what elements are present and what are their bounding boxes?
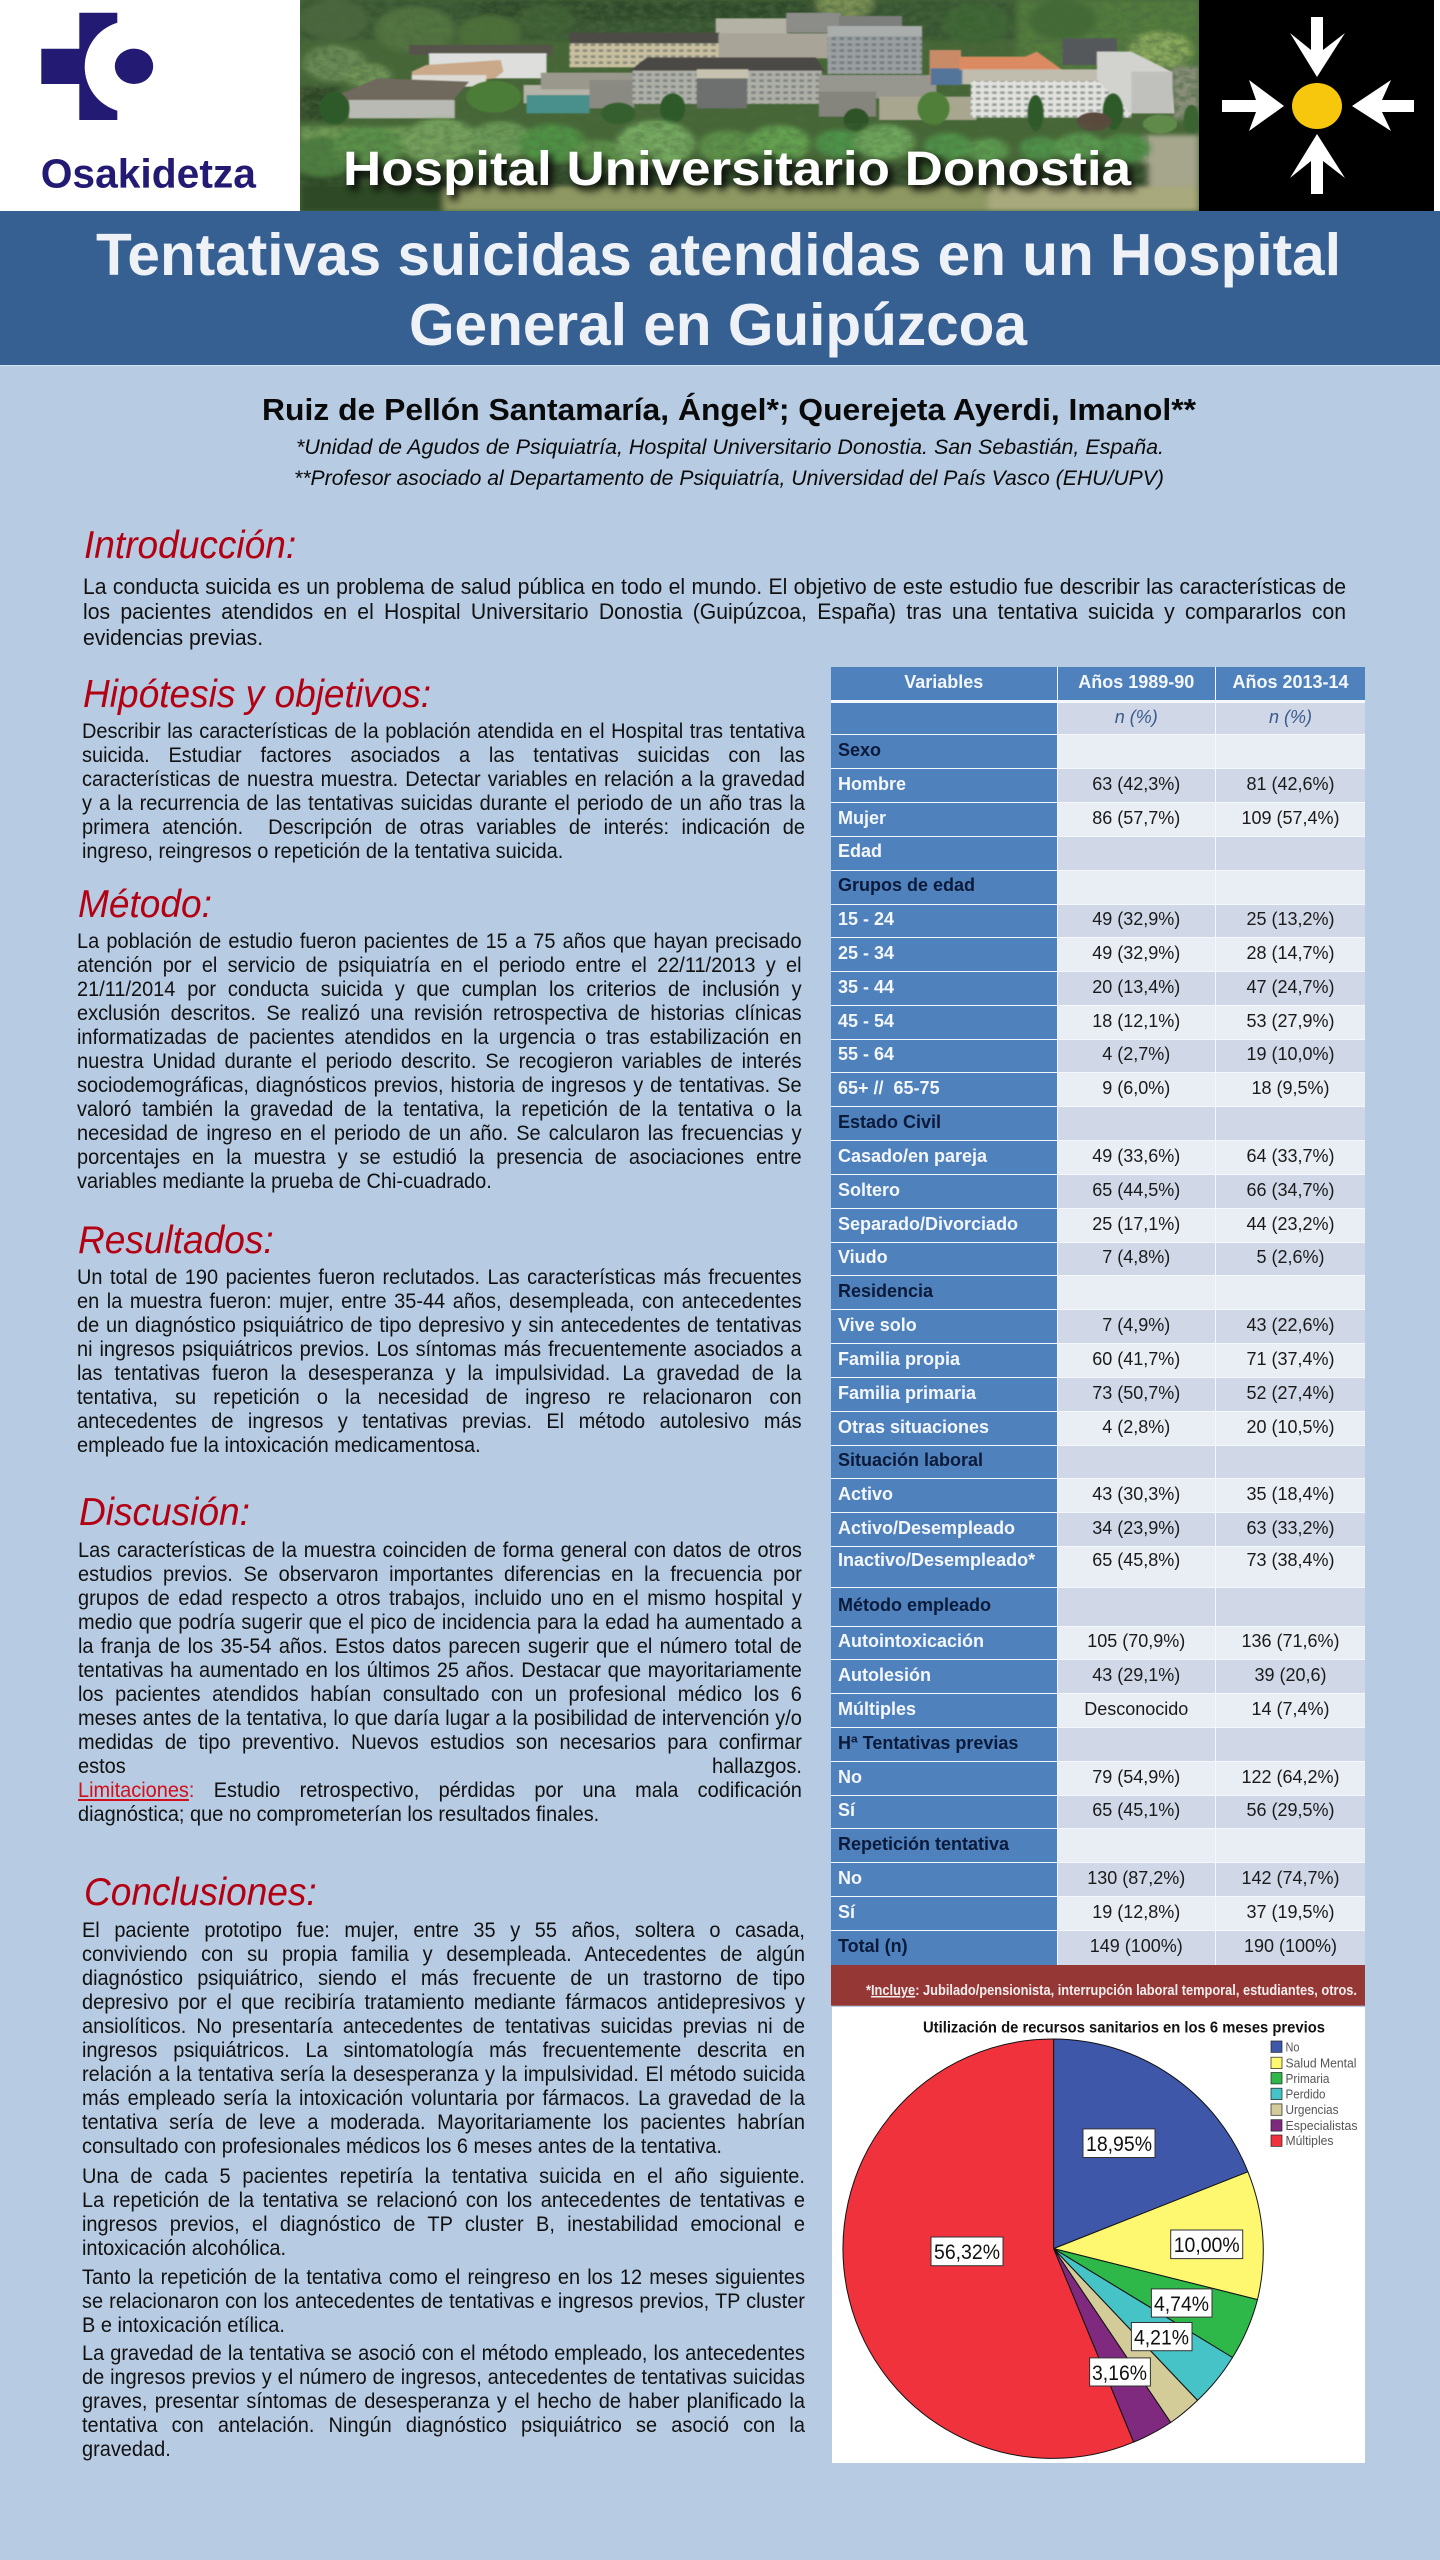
legend: Perdido	[1286, 2088, 1326, 2102]
row: 35 - 44: 35 - 44	[838, 976, 894, 996]
data label: 10,00%: 10,00%	[1174, 2234, 1240, 2257]
text: conclusiones párrafo 1: ansiolíticos. No presentaría antecedentes de tentativas suicidas previas ni de	[82, 2015, 805, 2038]
text: conclusiones párrafo 4: graves, presentar síntomas de desesperanza y el hecho de haber planificado la	[82, 2390, 805, 2412]
text: resultados: de un diagnóstico psiquiátrico de tipo depresivo y sin antecedentes de tentativas	[77, 1314, 802, 1336]
text: método: exclusión descritos. Se realizó una revisión retrospectiva de historias clínicas	[77, 1002, 802, 1025]
row: Activo: 35 (18,4%)	[1246, 1484, 1335, 1504]
row: Múltiples: Desconocido	[1084, 1698, 1188, 1718]
row: Sí (tentativas): Sí	[838, 1800, 855, 1820]
row: Otras situaciones: 4 (2,8%)	[1102, 1416, 1170, 1436]
row: Viudo: 7 (4,8%)	[1102, 1247, 1170, 1267]
row: No (tentativas): 79 (54,9%)	[1092, 1766, 1180, 1786]
row: 25 - 34	[831, 938, 1365, 972]
legend: Salud Mental	[1286, 2056, 1356, 2070]
text: conclusiones párrafo 1: depresivo por el que recibiría tratamiento mediante fármacos antidepresivos y	[82, 1991, 805, 2014]
row: Repetición tentativa	[831, 1829, 1365, 1863]
text: método: La población de estudio fueron pacientes de 15 a 75 años que hayan precisado	[77, 930, 802, 953]
row: Grupos de edad: Grupos de edad	[838, 875, 975, 895]
row: Activo/Desempleado	[831, 1513, 1365, 1547]
row: n (%)	[831, 703, 1365, 735]
text: conclusiones párrafo 2: ingresos previos, el diagnóstico de TP cluster B, inestabilidad emocional e	[82, 2212, 805, 2236]
text: resultados: las tentativas fueron la desesperanza y la impulsividad. La gravedad de la	[77, 1362, 802, 1384]
photo: aerial view of the hospital	[300, 0, 1199, 211]
row: Múltiples: 14 (7,4%)	[1251, 1698, 1330, 1718]
row: Estado Civil: Estado Civil	[838, 1112, 941, 1132]
footnote band and pie chart	[831, 1965, 1365, 2463]
row: Separado/Divorciado	[831, 1209, 1365, 1243]
right-hand buildings	[819, 75, 936, 98]
text: conclusiones párrafo 3	[82, 2266, 805, 2336]
data label: 56,32%: 56,32%	[934, 2241, 1000, 2264]
text: discusión: medio que podría sugerir que el pico de incidencia para la edad ha aumentado a	[78, 1611, 802, 1634]
row: No (repetición): No	[838, 1868, 862, 1888]
row: 45 - 54: 18 (12,1%)	[1092, 1010, 1180, 1030]
row: 15 - 24: 15 - 24	[838, 909, 894, 929]
data label: 4,74%: 4,74%	[1154, 2293, 1209, 2316]
text: resultados: antecedentes de ingresos y tentativas previas. El método autolesivo más	[77, 1410, 802, 1432]
row: Autointoxicación	[831, 1627, 1365, 1660]
text: discusión: Las características de la muestra coinciden de forma general con datos de otros	[78, 1539, 802, 1562]
chart title: Utilización de recursos sanitarios en los 6 meses previos	[923, 2020, 1325, 2036]
row: Soltero	[831, 1175, 1365, 1209]
row: Múltiples: Múltiples	[838, 1698, 916, 1718]
header banner	[0, 0, 1440, 211]
row: Familia primaria: Familia primaria	[838, 1382, 976, 1402]
text: conclusiones párrafo 1: conviviendo con su propia familia y desempleada. Antecedentes de algún	[82, 1943, 805, 1966]
row: Sí (repetición): Sí	[838, 1902, 855, 1922]
top-centre buildings	[716, 18, 787, 35]
row: 55 - 64: 19 (10,0%)	[1246, 1044, 1335, 1064]
heading: Resultados: Resultados:	[78, 1218, 274, 1262]
text: conclusiones párrafo 2: Una de cada 5 pacientes repetiría la tentativa suicida en el año siguiente.	[82, 2164, 805, 2188]
data label: 3,16%: 3,16%	[1092, 2362, 1147, 2385]
text: conclusiones párrafo 4	[82, 2342, 805, 2460]
row: Otras situaciones	[831, 1412, 1365, 1446]
row: Autolesión	[831, 1660, 1365, 1694]
authors and affiliations	[262, 392, 1197, 490]
row: Residencia	[831, 1276, 1365, 1310]
row: Mujer: 109 (57,4%)	[1241, 808, 1340, 828]
row: Método empleado: Método empleado	[838, 1595, 991, 1615]
heading: Conclusiones: Conclusiones:	[84, 1871, 317, 1914]
row: Edad: Edad	[838, 841, 882, 861]
row: 45 - 54: 53 (27,9%)	[1246, 1010, 1335, 1030]
row: Soltero: 66 (34,7%)	[1246, 1180, 1335, 1200]
text: resultados: tentativa, su repetición o la necesidad de ingreso re relacionaron con	[77, 1386, 802, 1408]
row: Sí (repetición): 37 (19,5%)	[1246, 1902, 1335, 1922]
row: Autointoxicación: 136 (71,6%)	[1241, 1631, 1340, 1651]
data table: variables by period	[831, 667, 1365, 1965]
row: n (%): n (%)	[1115, 706, 1158, 726]
panel: Resultados	[77, 1218, 802, 1456]
text: resultados: ni ingresos psiquiátricos previos. Los síntomas más frecuentemente asociados a	[77, 1338, 802, 1360]
text: conclusiones párrafo 1: ingresos psiquiátricos. La sintomatología más frecuentemente descrita en	[82, 2039, 805, 2062]
icon: arrows pointing to centre	[1222, 17, 1414, 194]
row: Sí (tentativas)	[831, 1796, 1365, 1829]
row: Hombre: Hombre	[838, 774, 906, 794]
row: Edad	[831, 837, 1365, 870]
title: General en Guipúzcoa	[409, 292, 1028, 358]
text: introducción: los pacientes atendidos en el Hospital Universitario Donostia (Guipúzcoa, España) tras una tentativa suicida y compararlos con	[83, 599, 1346, 624]
row: 25 - 34: 49 (32,9%)	[1092, 942, 1180, 962]
row: Mujer: Mujer	[838, 808, 886, 828]
row: 35 - 44: 20 (13,4%)	[1092, 976, 1180, 996]
row: Vive solo	[831, 1310, 1365, 1344]
heading: Método: Método:	[78, 883, 212, 926]
text: método: atención por el servicio de psiquiatría en el periodo entre el 22/11/2013 y el	[77, 954, 802, 977]
panel: Método	[77, 883, 802, 1193]
row: Hombre	[831, 769, 1365, 803]
text: método: variables mediante la prueba de Chi-cuadrado.	[77, 1170, 492, 1193]
row: Sí (repetición)	[831, 1897, 1365, 1931]
text: discusión	[78, 1539, 802, 1826]
row: 15 - 24: 25 (13,2%)	[1246, 909, 1335, 929]
text: discusión: grupos de edad respecto a otros trabajos, incluido uno en el mismo hospital y	[78, 1587, 802, 1610]
legend: Primaria	[1286, 2072, 1330, 2086]
row: Casado/en pareja	[831, 1141, 1365, 1175]
affiliation 2: **Profesor asociado al Departamento de Psiquiatría, Universidad del País Vasco (EHU/UPV)	[294, 466, 1164, 490]
left-hand buildings	[409, 45, 552, 55]
row: Grupos de edad	[831, 870, 1365, 904]
text: hipótesis: Describir las características de la población atendida en el Hospital tras tentativa	[82, 720, 805, 742]
panel: Introducción	[83, 524, 1346, 650]
text: conclusiones párrafo 2: intoxicación alcohólica.	[82, 2236, 286, 2260]
row: Otras situaciones: 20 (10,5%)	[1246, 1416, 1335, 1436]
row: Hª Tentativas previas: Hª Tentativas previas	[838, 1732, 1018, 1752]
text: conclusiones párrafo 4: de ingresos previos y el número de ingresos, antecedentes de tentativas suicidas	[82, 2366, 805, 2388]
row: Vive solo: 43 (22,6%)	[1246, 1314, 1335, 1334]
row: Soltero: Soltero	[838, 1180, 900, 1200]
legend	[1271, 2040, 1358, 2148]
row: 65+ // 65-75: 9 (6,0%)	[1102, 1078, 1170, 1098]
row: Sí (tentativas): 56 (29,5%)	[1246, 1800, 1335, 1820]
row: Mujer	[831, 803, 1365, 837]
logo: Osakidetza	[0, 0, 300, 211]
text: discusión: estudios previos. Se observaron importantes diferencias en la frecuencia por	[78, 1563, 802, 1586]
text: hipótesis: suicida. Estudiar factores asociados a las tentativas suicidas con las	[82, 744, 805, 766]
table header row: Años 2013-14	[1232, 672, 1349, 692]
row: Sexo: Sexo	[838, 740, 881, 760]
text: método: porcentajes en la muestra y se estudió la presencia de asociaciones entre	[77, 1146, 802, 1169]
heading: Hipótesis y objetivos: Hipótesis y objetivos:	[83, 673, 431, 716]
row: 65+ // 65-75	[831, 1073, 1365, 1107]
row: No (tentativas)	[831, 1762, 1365, 1796]
row: Total (n): Total (n)	[838, 1936, 908, 1956]
row: No (repetición): 142 (74,7%)	[1241, 1868, 1340, 1888]
row: 35 - 44: 47 (24,7%)	[1246, 976, 1335, 996]
authors: Ruiz de Pellón Santamaría, Ángel*; Querejeta Ayerdi, Imanol**	[262, 392, 1197, 427]
footnote band	[831, 1965, 1365, 2006]
row: Autolesión: 39 (20,6)	[1254, 1664, 1327, 1684]
text: conclusiones párrafo 1: El paciente prototipo fue: mujer, entre 35 y 55 años, soltera o casada,	[82, 1919, 805, 1942]
row: Residencia: Residencia	[838, 1280, 933, 1300]
row: 55 - 64	[831, 1040, 1365, 1073]
text: conclusiones párrafo 1: relación a la tentativa sería la desesperanza y la impulsividad. El método suicida	[82, 2063, 805, 2086]
row: Activo/Desempleado: 34 (23,9%)	[1092, 1518, 1180, 1538]
text: discusión: tentativas ha aumentado en los últimos 25 años. Destacar que mayoritariamente	[78, 1659, 802, 1682]
row: Casado/en pareja: Casado/en pareja	[838, 1146, 987, 1166]
row: Familia propia: 71 (37,4%)	[1246, 1348, 1335, 1368]
text: conclusiones párrafo 4: tentativa con antelación. Ningún diagnóstico psiquiátrico se asoció con la	[82, 2414, 805, 2436]
text: método: necesidad de ingreso en el periodo de un año. Se calcularon las frecuencias y	[77, 1122, 802, 1145]
text: hipótesis: primera atención. Descripción de otras variables de interés: indicación de	[82, 816, 805, 838]
text: discusión: los pacientes atendidos habían consultado con un profesional médico los 6	[78, 1683, 802, 1706]
row: Casado/en pareja: 49 (33,6%)	[1092, 1146, 1180, 1166]
row: 25 - 34: 28 (14,7%)	[1246, 942, 1335, 962]
panel: Discusión	[78, 1491, 802, 1826]
row: Vive solo: 7 (4,9%)	[1102, 1314, 1170, 1334]
row: 35 - 44	[831, 972, 1365, 1006]
row: 55 - 64: 55 - 64	[838, 1044, 894, 1064]
row: Casado/en pareja: 64 (33,7%)	[1246, 1146, 1335, 1166]
row: Total (n): 149 (100%)	[1090, 1936, 1183, 1956]
row: 15 - 24	[831, 904, 1365, 938]
row: Inactivo/Desempleado: 65 (45,8%)	[1092, 1550, 1180, 1570]
row: 25 - 34: 25 - 34	[838, 942, 894, 962]
row: Familia propia: Familia propia	[838, 1348, 960, 1368]
row: No (repetición): 130 (87,2%)	[1087, 1868, 1185, 1888]
title: Tentativas suicidas atendidas en un Hospital	[96, 222, 1341, 288]
row: Vive solo: Vive solo	[838, 1314, 917, 1334]
row: Situación laboral	[831, 1446, 1365, 1479]
text: método: sociodemográficas, diagnósticos previos, historia de ingresos y de tentativas. Se	[77, 1074, 802, 1097]
text: método: nuestra Unidad durante el periodo descrito. Se recogieron variables de interés	[77, 1050, 802, 1073]
row: Activo/Desempleado: Activo/Desempleado	[838, 1518, 1015, 1538]
row: Activo: Activo	[838, 1484, 893, 1504]
row: Activo: 43 (30,3%)	[1092, 1484, 1180, 1504]
text: resultados: empleado fue la intoxicación medicamentosa.	[77, 1434, 481, 1456]
text: hipótesis: y a la recurrencia de las tentativas suicidas durante el periodo de un año tras la	[82, 792, 805, 814]
row: 65+ // 65-75: 18 (9,5%)	[1251, 1078, 1330, 1098]
row: Inactivo/Desempleado: 73 (38,4%)	[1246, 1550, 1335, 1570]
row: Familia propia	[831, 1344, 1365, 1378]
row: Sexo	[831, 735, 1365, 769]
row: Método empleado	[831, 1588, 1365, 1627]
legend: Múltiples	[1286, 2134, 1334, 2148]
row: Familia primaria: 52 (27,4%)	[1246, 1382, 1335, 1402]
row: Activo	[831, 1479, 1365, 1513]
text: método: 21/11/2014 por conducta suicida y que cumplan los criterios de inclusión y	[77, 978, 802, 1001]
data label: 4,21%: 4,21%	[1134, 2326, 1189, 2350]
row: Hombre: 81 (42,6%)	[1246, 774, 1335, 794]
text: conclusiones párrafo 3: B e intoxicación etílica.	[82, 2314, 285, 2336]
row: Inactivo/Desempleado	[831, 1547, 1365, 1588]
data label: 18,95%: 18,95%	[1086, 2133, 1152, 2156]
text: conclusiones párrafo 1: consultado con profesionales médicos los 6 meses antes de la tentativa.	[82, 2135, 722, 2158]
text: discusión: medidas de tipo preventivo. Nuevos estudios son necesarios para confirmar	[78, 1731, 802, 1754]
title	[96, 222, 1341, 358]
row: Familia primaria	[831, 1378, 1365, 1412]
title band	[0, 211, 1440, 366]
text: resultados	[77, 1266, 802, 1456]
chart panel	[832, 2007, 1365, 2463]
row: 65+ // 65-75: 65+ // 65-75	[838, 1078, 940, 1098]
text: discusión: Limitaciones: Estudio retrospectivo, pérdidas por una mala codificación	[78, 1779, 802, 1802]
row: Autolesión: 43 (29,1%)	[1092, 1664, 1180, 1684]
table header row: Años 1989-90	[1078, 672, 1194, 692]
row: Soltero: 65 (44,5%)	[1092, 1180, 1180, 1200]
text: introducción: La conducta suicida es un problema de salud pública en todo el mundo. El objetivo de este estudio fue describir las características de	[83, 574, 1346, 599]
row: 55 - 64: 4 (2,7%)	[1102, 1044, 1170, 1064]
row: Familia propia: 60 (41,7%)	[1092, 1348, 1180, 1368]
text: conclusiones párrafo 4: La gravedad de la tentativa se asoció con el método empleado, los antecedentes	[82, 2342, 805, 2364]
row: Inactivo/Desempleado: Inactivo/Desempleado*	[838, 1550, 1035, 1570]
row: Sí (tentativas): 65 (45,1%)	[1092, 1800, 1180, 1820]
row: Viudo: Viudo	[838, 1247, 888, 1267]
row: Hombre: 63 (42,3%)	[1092, 774, 1180, 794]
row: Activo/Desempleado: 63 (33,2%)	[1246, 1518, 1335, 1538]
row: Hª Tentativas previas	[831, 1728, 1365, 1762]
legend: Urgencias	[1286, 2103, 1338, 2117]
panel: Conclusiones	[82, 1871, 805, 2460]
heading: Introducción: Introducción:	[84, 524, 296, 567]
row: Autointoxicación: Autointoxicación	[838, 1631, 984, 1651]
text: conclusiones párrafo 1: tentativa sería de leve a moderada. Mayoritariamente los pacientes habrían	[82, 2111, 805, 2134]
row: Viudo: 5 (2,6%)	[1256, 1247, 1325, 1267]
row: Separado/Divorciado: 25 (17,1%)	[1092, 1214, 1180, 1234]
row: Autolesión: Autolesión	[838, 1664, 931, 1684]
table header row: Variables	[904, 672, 983, 692]
text: hipótesis: características de nuestra muestra. Detectar variables en relación a la gravedad	[82, 768, 805, 790]
text: método: valoró también la gravedad de la tentativa, la repetición de la tentativa o la	[77, 1098, 802, 1121]
row: Separado/Divorciado: Separado/Divorciado	[838, 1214, 1018, 1234]
logo: black panel with arrows and yellow circle	[1199, 0, 1434, 211]
row: 15 - 24: 49 (32,9%)	[1092, 909, 1180, 929]
text: introducción	[83, 574, 1346, 650]
row: Familia primaria: 73 (50,7%)	[1092, 1382, 1180, 1402]
row: 45 - 54	[831, 1006, 1365, 1040]
row: Viudo	[831, 1243, 1365, 1276]
heading: Discusión: Discusión:	[79, 1491, 250, 1534]
row: n (%): n (%)	[1269, 706, 1312, 726]
icon: yellow centre	[1292, 83, 1342, 129]
table header row	[831, 667, 1365, 700]
text: discusión: estos hallazgos.	[78, 1755, 802, 1778]
row: Múltiples	[831, 1694, 1365, 1728]
text: hipótesis	[82, 720, 805, 862]
photo caption: Hospital Universitario Donostia: Hospital Universitario Donostia	[343, 143, 1131, 196]
pie chart	[843, 2039, 1263, 2458]
row: Estado Civil	[831, 1107, 1365, 1141]
row: Mujer: 86 (57,7%)	[1092, 808, 1180, 828]
text: conclusiones párrafo 2: La repetición de la tentativa se relacionó con los antecedentes de tentativas e	[82, 2188, 805, 2212]
text: método	[77, 930, 802, 1193]
text: conclusiones párrafo 1: diagnóstico psiquiátrico, siendo el más frecuente de un trastorno de tipo	[82, 1967, 805, 1990]
row: No (tentativas): No	[838, 1766, 862, 1786]
row: Total (n): 190 (100%)	[1244, 1936, 1337, 1956]
text: hipótesis: ingreso, reingresos o repetición de la tentativa suicida.	[82, 840, 563, 862]
text: conclusiones párrafo 1: más empleado sería la intoxicación voluntaria por fármacos. La gravedad de la	[82, 2087, 805, 2110]
text: conclusiones párrafo 3: se relacionaron con los antecedentes de tentativas e ingresos previos, TP cluster	[82, 2290, 805, 2312]
text: introducción: evidencias previas.	[83, 625, 263, 650]
text: conclusiones párrafo 3: Tanto la repetición de la tentativa como el reingreso en los 12 meses siguientes	[82, 2266, 805, 2288]
legend: No	[1286, 2040, 1300, 2054]
row: Autointoxicación: 105 (70,9%)	[1087, 1631, 1185, 1651]
icon: Osakidetza cross and circle	[41, 13, 153, 120]
row: Sí (repetición): 19 (12,8%)	[1092, 1902, 1180, 1922]
foreground grass and trees	[289, 119, 1199, 211]
text: conclusiones párrafo 4: gravedad.	[82, 2438, 171, 2460]
central block	[524, 85, 590, 103]
row: Repetición tentativa: Repetición tentativa	[838, 1834, 1009, 1854]
logo wordmark: Osakidetza	[41, 150, 257, 196]
affiliation 1: *Unidad de Agudos de Psiquiatría, Hospital Universitario Donostia. San Sebastián, España.	[296, 435, 1164, 459]
row: 45 - 54: 45 - 54	[838, 1010, 894, 1030]
text: discusión: la franja de los 35-54 años. Estos datos parecen sugerir que el número total de	[78, 1635, 802, 1658]
row: Situación laboral: Situación laboral	[838, 1450, 983, 1470]
row: No (repetición)	[831, 1863, 1365, 1897]
text: resultados: Un total de 190 pacientes fueron reclutados. Las características más frecuentes	[77, 1266, 802, 1288]
text: resultados: en la muestra fueron: mujer, entre 35-44 años, desempleada, con antecedentes	[77, 1290, 802, 1312]
row: Separado/Divorciado: 44 (23,2%)	[1246, 1214, 1335, 1234]
legend: Especialistas	[1286, 2119, 1358, 2133]
text: método: informatizadas de pacientes atendidos en la urgencia o tras estabilización en	[77, 1026, 802, 1049]
text: conclusiones párrafo 2	[82, 2164, 805, 2260]
text: discusión: meses antes de la tentativa, lo que daría lugar a la posibilidad de intervención y/o	[78, 1707, 802, 1730]
row: Total (n)	[831, 1931, 1365, 1965]
panel: Hipótesis y objetivos	[82, 673, 805, 862]
row: No (tentativas): 122 (64,2%)	[1241, 1766, 1340, 1786]
text: discusión: diagnóstica; que no comprometerían los resultados finales.	[78, 1803, 599, 1826]
text: conclusiones párrafo 1	[82, 1919, 805, 2158]
row: Otras situaciones: Otras situaciones	[838, 1416, 989, 1436]
